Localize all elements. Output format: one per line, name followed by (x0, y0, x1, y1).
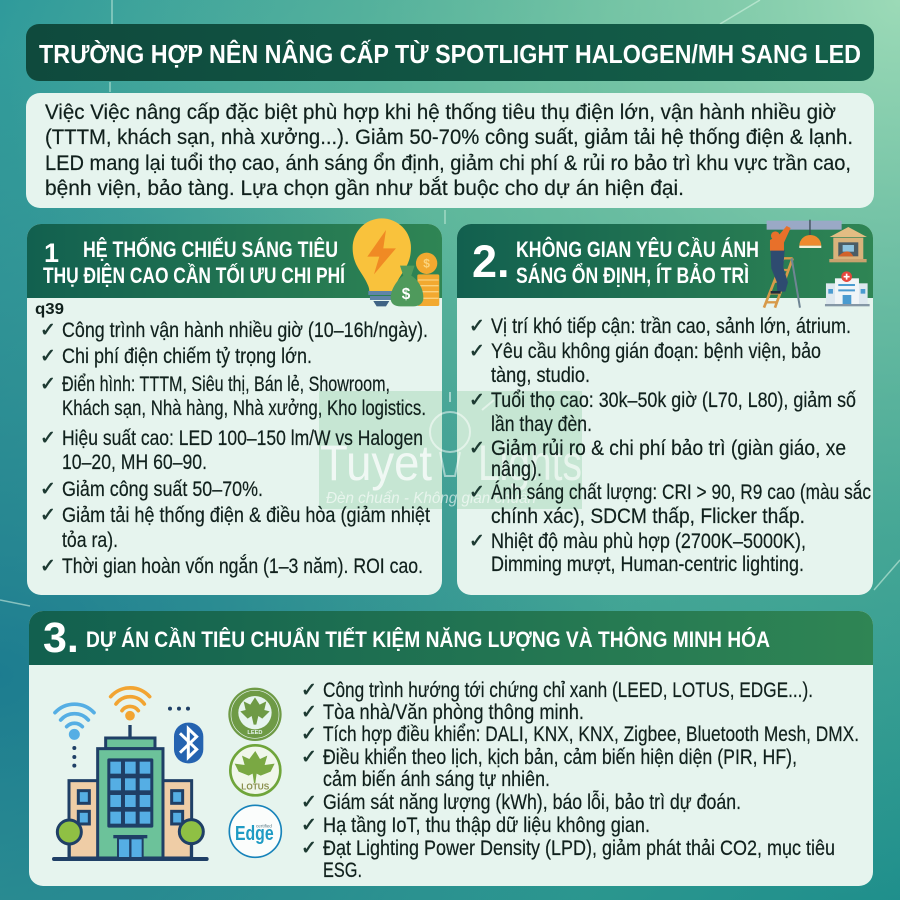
panel 1 header (27, 224, 442, 298)
watermark: Tuyet Lights: Lights (478, 435, 582, 491)
panel 1 checklist (40, 319, 430, 578)
panel 1 checklist: ✓ (40, 345, 56, 367)
panel 3 checklist: ✓ (301, 814, 317, 836)
title bar (26, 24, 874, 81)
icon: worker on ladder with lamp, museum, hospital (764, 220, 870, 308)
panel 3 header: 3. (43, 614, 79, 662)
panel 3 checklist: Tòa nhà/Văn phòng thông minh. (323, 701, 584, 724)
panel 2 header: SÁNG ỔN ĐỊNH, ÍT BẢO TRÌ (516, 263, 749, 288)
watermark: Tuyet Lights: Tuyet (320, 435, 432, 491)
panel 1 checklist: 10–20, MH 60–90. (62, 451, 207, 474)
badge: LEED: LEED (247, 730, 263, 736)
panel 2 checklist: Giảm rủi ro & chi phí bảo trì (giàn giáo, xe (491, 437, 846, 460)
panel 3 checklist: Hạ tầng IoT, thu thập dữ liệu không gian. (323, 814, 650, 837)
badge: LOTUS: LOTUS (241, 781, 270, 791)
side wings (69, 781, 99, 858)
panel 2 checklist: Dimming mượt, Human-centric lighting. (491, 553, 804, 576)
panel 2 checklist: ✓ (469, 315, 485, 337)
panel 3 checklist: ✓ (301, 791, 317, 813)
panel 1 checklist: ✓ (40, 504, 56, 526)
panel 3 checklist: ✓ (301, 723, 317, 745)
panel 2 checklist: ✓ (469, 437, 485, 459)
panel 1 checklist: Chi phí điện chiếm tỷ trọng lớn. (62, 345, 312, 368)
badge: LOTUS (230, 745, 280, 795)
wifi signal top (111, 688, 150, 719)
trees (69, 845, 191, 858)
panel 2 checklist: Nhiệt độ màu phù hợp (2700K–5000K), (491, 530, 806, 553)
label q39: q39 (35, 301, 64, 318)
intro text: (TTTM, khách sạn, nhà xưởng...). Giảm 50-70% công suất, giảm tải hệ thống điện & lạnh. (45, 126, 853, 149)
panel 1 header: THỤ ĐIỆN CAO CẦN TỐI ƯU CHI PHÍ (43, 262, 346, 288)
wifi signal left (55, 704, 94, 738)
panel 1 checklist: tỏa ra). (62, 529, 118, 552)
panel 3 checklist: ESG. (323, 859, 362, 882)
panel 3 header (29, 611, 873, 665)
panel 2 checklist: chính xác), SDCM thấp, Flicker thấp. (491, 505, 805, 528)
panel 3 checklist: ✓ (301, 701, 317, 723)
panel 3 checklist: Giám sát năng lượng (kWh), báo lỗi, bảo trì dự đoán. (323, 791, 741, 814)
panel 2 checklist: ✓ (469, 481, 485, 503)
panel 3 checklist: ✓ (301, 746, 317, 768)
panel 3 checklist: Điều khiển theo lịch, kịch bản, cảm biến hiện diện (PIR, HF), (323, 746, 797, 769)
panel 1 checklist: ✓ (40, 319, 56, 341)
panel 3 checklist: ✓ (301, 837, 317, 859)
panel 3 checklist (301, 679, 859, 882)
panel 1 checklist: Khách sạn, Nhà hàng, Nhà xưởng, Kho logistics. (62, 397, 426, 420)
panel 1 header: 1 (44, 238, 59, 268)
panel 2 header: KHÔNG GIAN YÊU CẦU ÁNH (516, 237, 759, 262)
badge: EDGE: certified (256, 823, 272, 829)
badge: LEED (228, 688, 282, 741)
intro text (45, 101, 853, 200)
intro text: Việc Việc nâng cấp đặc biệt phù hợp khi hệ thống tiêu thụ điện lớn, vận hành nhiều giờ (45, 101, 836, 124)
panel 3: energy saving and smart standards (29, 611, 873, 886)
panel 2 checklist: lần thay đèn. (491, 413, 592, 436)
panel 2 header: 2. (472, 236, 510, 287)
panel 2 checklist: Vị trí khó tiếp cận: trần cao, sảnh lớn, átrium. (491, 315, 851, 338)
panel 2 checklist (469, 315, 871, 576)
panel: introduction (26, 93, 874, 208)
panel 2 checklist: ✓ (469, 340, 485, 362)
panel 1 checklist: ✓ (40, 555, 56, 577)
panel 1 checklist: Giảm tải hệ thống điện & điều hòa (giảm nhiệt (62, 504, 430, 527)
badge: EDGE (229, 805, 281, 857)
intro text: bệnh viện, bảo tàng. Lựa chọn gần như bắt buộc cho dự án hiện đại. (45, 177, 684, 200)
watermark: Tuyet Lights (319, 391, 582, 509)
tower (125, 725, 135, 738)
panel 1 checklist: Hiệu suất cao: LED 100–150 lm/W vs Halogen (62, 427, 423, 450)
panel 3 checklist: cảm biến ánh sáng tự nhiên. (323, 768, 550, 791)
panel 3 checklist: ✓ (301, 679, 317, 701)
panel 1 checklist: Công trình vận hành nhiều giờ (10–16h/ngày). (62, 319, 428, 342)
panel cards for sections 1 and 2 (27, 224, 873, 595)
panel 3 header: DỰ ÁN CẦN TIÊU CHUẨN TIẾT KIỆM NĂNG LƯỢNG VÀ THÔNG MINH HÓA (86, 627, 770, 652)
bluetooth badge (174, 723, 203, 763)
panel 1 checklist: ✓ (40, 427, 56, 449)
intro text: LED mang lại tuổi thọ cao, ánh sáng ổn định, giảm chi phí & rủi ro bảo trì khu vực trần cao, (45, 152, 851, 175)
icon: smart building (52, 688, 209, 861)
icon: light bulb with money: $ (402, 286, 411, 303)
panel 2 checklist: Yêu cầu không gián đoạn: bệnh viện, bảo (491, 340, 821, 363)
panel 2 checklist: nâng). (491, 458, 542, 481)
panel 1 checklist: ✓ (40, 373, 56, 395)
panel 1 header: HỆ THỐNG CHIẾU SÁNG TIÊU (83, 236, 338, 262)
panel 1 checklist: Điển hình: TTTM, Siêu thị, Bán lẻ, Showroom, (62, 373, 390, 396)
panel 1 checklist: Thời gian hoàn vốn ngắn (1–3 năm). ROI cao. (62, 555, 423, 578)
panel 1 checklist: Giảm công suất 50–70%. (62, 478, 263, 501)
panel 2 checklist: ✓ (469, 389, 485, 411)
panel 1: high energy consumption (27, 218, 442, 595)
panel 2 checklist: ✓ (469, 530, 485, 552)
panel 2 checklist: tàng, studio. (491, 364, 590, 387)
badge: EDGE: Edge (235, 823, 274, 845)
icon: light bulb with money: $ (423, 257, 430, 271)
panel 2: stable light, low maintenance (457, 220, 873, 595)
watermark: Tuyet Lights: Đèn chuẩn - Không gian chuẩn (326, 489, 536, 507)
panel 1 checklist: ✓ (40, 478, 56, 500)
icon: light bulb with money (353, 218, 439, 306)
panel 2 header (457, 224, 873, 298)
